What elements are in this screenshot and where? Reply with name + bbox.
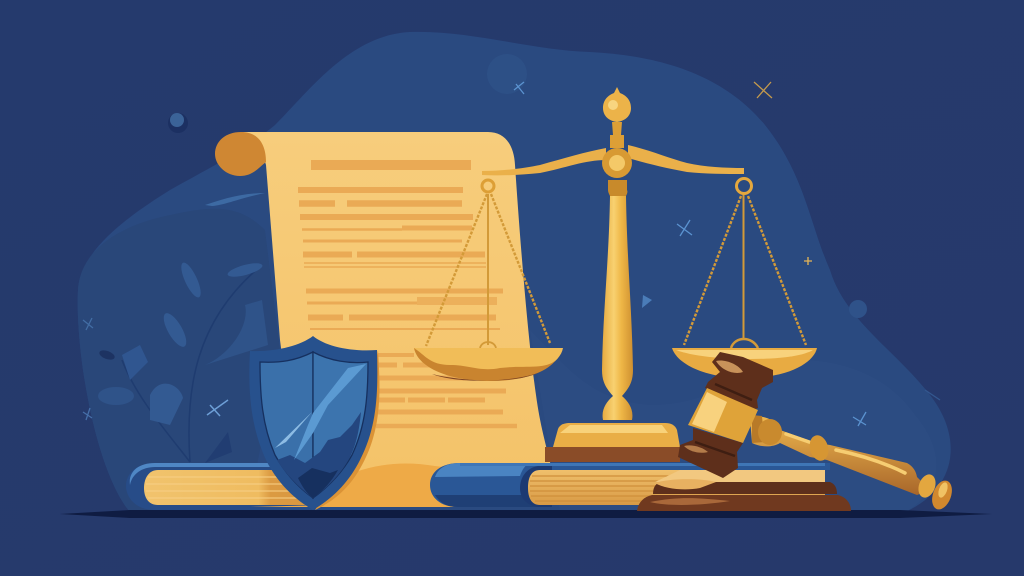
background blob: left foliage panel [78, 209, 280, 512]
background sparkles [83, 54, 940, 426]
right chains [684, 195, 806, 348]
gavel handle [750, 416, 930, 495]
ground shadow line [60, 510, 992, 518]
scroll bottom fold [250, 464, 552, 507]
shield orange shadow [315, 350, 379, 510]
gavel upper head [705, 352, 773, 410]
shield inner left [260, 352, 313, 498]
gavel lower head [678, 428, 743, 478]
foliage [98, 193, 268, 463]
shield dark lower shade [277, 412, 361, 498]
background blob: lower shade [530, 330, 936, 512]
shield inner right [313, 352, 368, 498]
left chains [426, 194, 550, 348]
scale base [545, 447, 680, 462]
gavel gold band [688, 388, 758, 443]
shield [249, 336, 379, 510]
scroll text lines [298, 165, 517, 426]
left hook ring [482, 180, 494, 192]
right hook ring [736, 178, 752, 194]
left pan [414, 348, 563, 381]
scale medallion [602, 148, 632, 178]
scroll [215, 132, 552, 507]
background blob [78, 32, 951, 512]
scale beam [482, 148, 606, 175]
book right cover [430, 463, 830, 507]
scroll paper [240, 132, 552, 507]
scale finial [603, 87, 631, 148]
book right [430, 463, 830, 507]
scales of justice [414, 87, 817, 462]
book left [126, 463, 360, 510]
shield outer [249, 336, 377, 510]
scroll roll end [215, 132, 266, 176]
book right pages [528, 470, 825, 505]
scale pillar [602, 196, 633, 420]
gavel [678, 352, 956, 512]
right pan [672, 348, 817, 378]
gavel block [637, 479, 851, 511]
shield highlight [294, 364, 366, 460]
